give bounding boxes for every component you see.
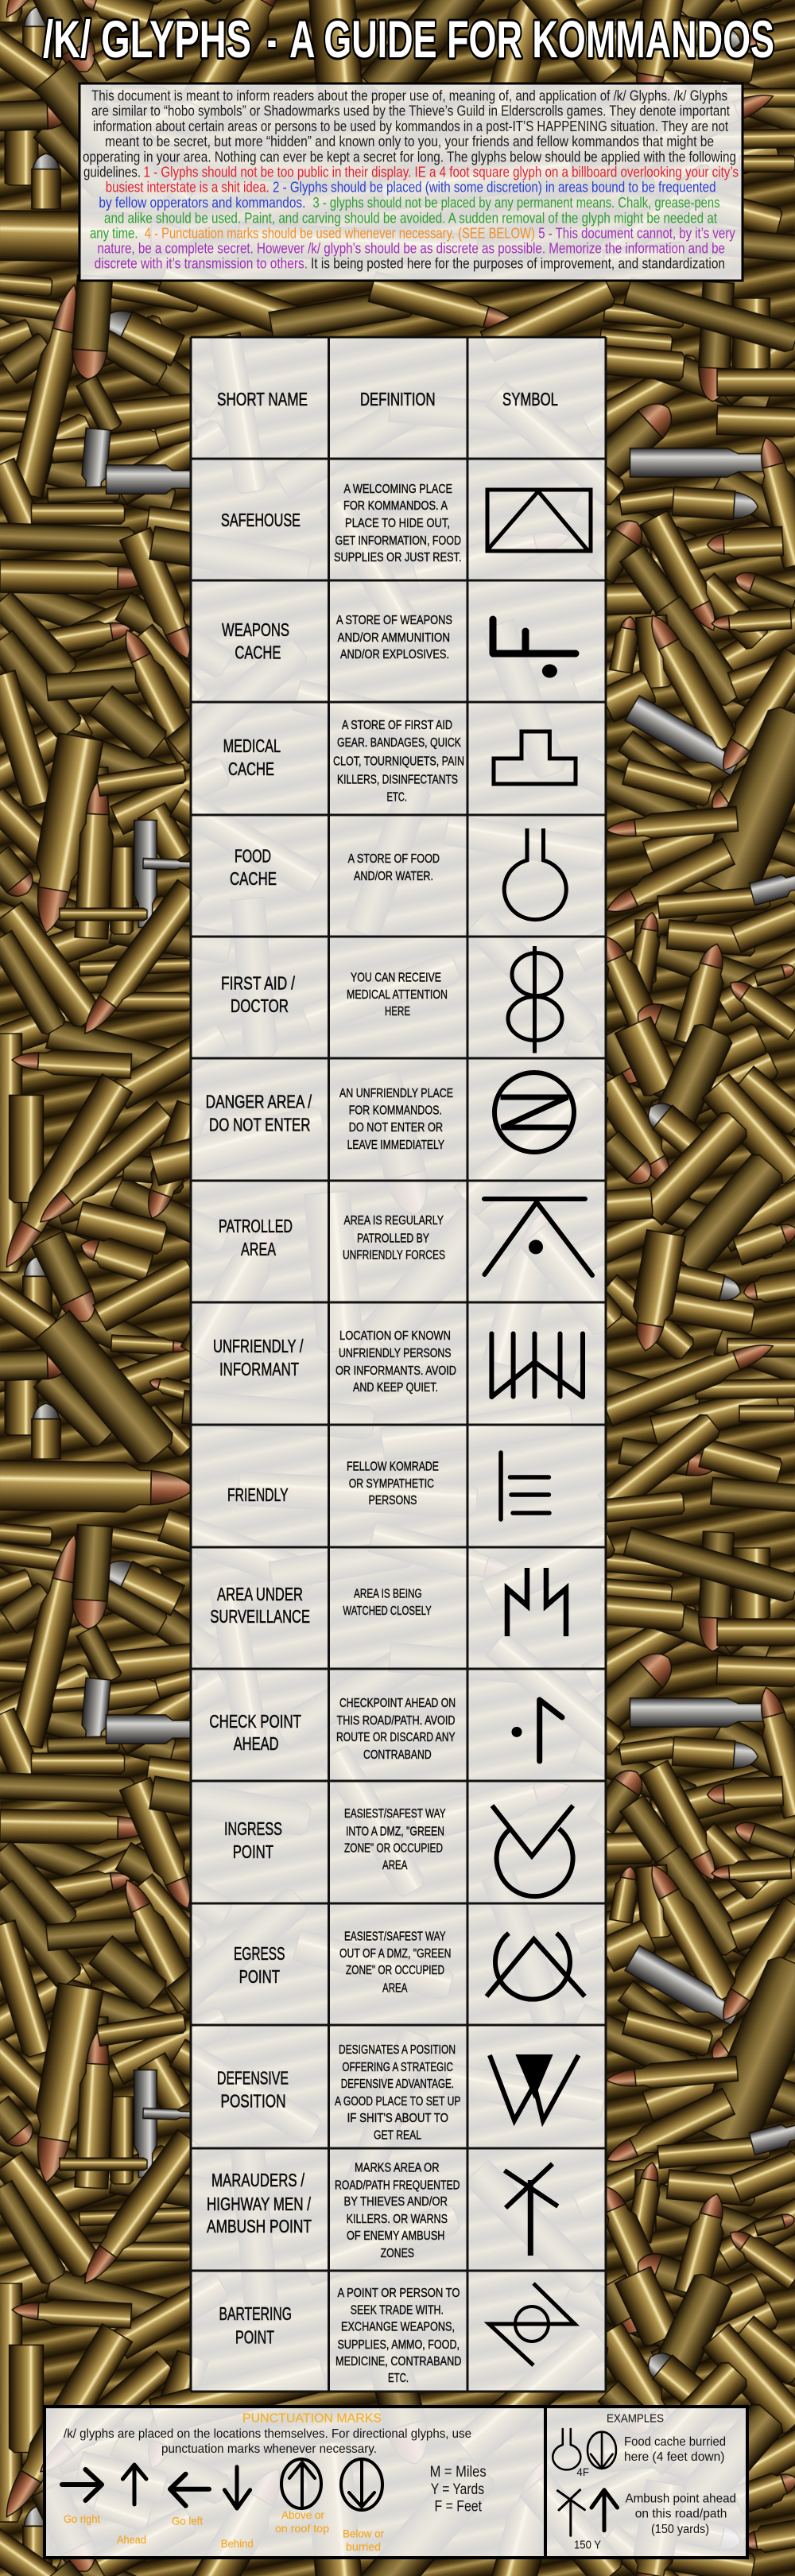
row: medical cache — [223, 719, 576, 805]
definition: bartering: SEEK TRADE WITH. — [351, 2304, 444, 2318]
definition: food cache: AND/OR WATER. — [354, 870, 433, 883]
definition: marauders: ROAD/PATH FREQUENTED — [335, 2178, 460, 2192]
definition: patrolled area — [343, 1214, 445, 1263]
definition: food cache — [348, 852, 440, 883]
definition: ingress: INTO A DMZ, "GREEN — [346, 1825, 444, 1839]
definition: danger area — [339, 1087, 453, 1152]
definition: bartering: SUPPLIES, AMMO, FOOD, — [337, 2338, 460, 2352]
table header row: SHORT NAME — [217, 389, 308, 409]
punctuation explanation text — [64, 2427, 471, 2456]
icon: weapons cache glyph — [493, 619, 576, 677]
definition: egress: AREA — [382, 1982, 408, 1996]
panel: introduction text: guidelines. — [83, 165, 141, 180]
definition: first aid: HERE — [385, 1005, 410, 1018]
example: ambush point ahead: on this road/path — [635, 2508, 727, 2521]
definition: weapons cache: AND/OR EXPLOSIVES. — [340, 648, 449, 661]
definition: check point: ROUTE OR DISCARD ANY — [336, 1731, 456, 1744]
definition: unfriendly: AND KEEP QUIET. — [353, 1381, 438, 1395]
panel: introduction text: 5 - This document cannot, by it’s very — [538, 225, 735, 241]
icon: danger area glyph — [494, 1073, 574, 1152]
row: medical cache: MEDICAL — [223, 735, 281, 756]
icon: arrow ahead — [122, 2465, 146, 2504]
panel: introduction text: meant to be secret, but more “hidden” and known only to you, your friends and fellow kommandos that might be — [105, 134, 714, 149]
table header row: SYMBOL — [502, 389, 558, 409]
definition: weapons cache — [336, 614, 452, 661]
arrow labels: Go right — [64, 2512, 100, 2525]
icon: circled arrow below — [341, 2459, 382, 2510]
panel: introduction text: It is being posted here for the purposes of improvement, and standardization — [311, 256, 725, 272]
arrow labels — [64, 2508, 384, 2553]
row: danger area — [206, 1073, 574, 1152]
definition: defensive: DEFENSIVE ADVANTAGE. — [341, 2077, 454, 2091]
icon: arrow go right — [62, 2469, 102, 2500]
definition: egress: ZONE" OR OCCUPIED — [346, 1964, 444, 1977]
row: unfriendly / informant — [213, 1329, 583, 1397]
definition: first aid — [347, 972, 448, 1018]
unit legend — [430, 2464, 487, 2516]
row: ingress point: POINT — [233, 1841, 273, 1862]
icon: ingress glyph — [492, 1806, 573, 1896]
row: bartering point: POINT — [235, 2326, 274, 2347]
row: food cache — [230, 828, 566, 920]
row: marauders: AMBUSH POINT — [207, 2216, 312, 2237]
panel: introduction text: busiest interstate is a shit idea. — [106, 180, 270, 196]
definition: first aid: MEDICAL ATTENTION — [347, 988, 448, 1002]
definition: check point: CHECKPOINT AHEAD ON — [339, 1697, 456, 1710]
definition: defensive: GET REAL — [374, 2129, 421, 2143]
row: patrolled area: AREA — [241, 1239, 276, 1259]
icon: marauders glyph — [505, 2164, 558, 2256]
punctuation explanation text: punctuation marks whenever necessary. — [161, 2442, 377, 2456]
row: weapons cache: WEAPONS — [222, 619, 289, 640]
icon: first aid glyph — [508, 946, 562, 1053]
definition: check point: CONTRABAND — [363, 1748, 432, 1762]
definition: ingress: EASIEST/SAFEST WAY — [344, 1807, 446, 1821]
example: food cache buried: 4F — [576, 2465, 589, 2478]
row: first aid / doctor: DOCTOR — [231, 995, 289, 1016]
definition: first aid: YOU CAN RECEIVE — [351, 972, 441, 985]
definition: defensive: DESIGNATES A POSITION — [339, 2043, 456, 2057]
row: ingress point — [224, 1806, 573, 1896]
definition: safehouse: SUPPLIES OR JUST REST. — [334, 551, 461, 564]
icon: arrow go left — [170, 2474, 209, 2506]
panel: punctuation marks and examples — [45, 2407, 747, 2558]
definition: marauders: MARKS AREA OR — [355, 2161, 440, 2175]
row: area under surveillance — [210, 1568, 566, 1636]
definition: bartering: ETC. — [388, 2372, 409, 2385]
panel: introduction text: by fellow opperators and kommandos. — [99, 195, 305, 211]
row: weapons cache: CACHE — [235, 642, 281, 663]
definition: check point: THIS ROAD/PATH. AVOID — [337, 1714, 455, 1728]
definition: bartering: EXCHANGE WEAPONS, — [341, 2320, 455, 2334]
heading: examples: EXAMPLES — [607, 2412, 664, 2426]
arrow labels: Behind — [221, 2537, 254, 2550]
row: friendly — [227, 1453, 549, 1519]
row: weapons cache — [222, 614, 576, 677]
definition: unfriendly: UNFRIENDLY PERSONS — [339, 1347, 452, 1360]
row: check point ahead — [209, 1697, 562, 1762]
row: egress point: EGRESS — [234, 1943, 285, 1964]
row: safehouse — [221, 483, 591, 564]
definition: medical cache — [333, 719, 464, 805]
definition: medical cache: CLOT, TOURNIQUETS, PAIN — [333, 755, 464, 768]
row: food cache: FOOD — [235, 846, 271, 867]
row: unfriendly / informant: INFORMANT — [219, 1359, 299, 1379]
icon: egress glyph — [487, 1934, 585, 2000]
row: marauders — [207, 2161, 558, 2260]
arrow labels: Ahead — [117, 2533, 146, 2546]
icon: medical cache glyph — [494, 731, 576, 784]
definition: surveillance: WATCHED CLOSELY — [343, 1604, 432, 1618]
definition: marauders: KILLERS. OR WARNS — [347, 2213, 448, 2226]
row: marauders: MARAUDERS / — [211, 2170, 304, 2190]
definition: danger area: AN UNFRIENDLY PLACE — [339, 1087, 453, 1100]
row: ingress point: INGRESS — [224, 1818, 282, 1839]
row: first aid / doctor — [221, 946, 562, 1053]
definition: marauders — [335, 2161, 460, 2260]
definition: friendly: FELLOW KOMRADE — [347, 1460, 439, 1474]
definition: ingress: ZONE" OR OCCUPIED — [344, 1842, 443, 1856]
panel: introduction text: 4 - Punctuation marks should be used whenever necessary. (SEE BELOW) — [145, 225, 535, 241]
definition: surveillance: AREA IS BEING — [354, 1588, 422, 1601]
definition: egress: OUT OF A DMZ, "GREEN — [339, 1947, 452, 1961]
icon: bartering glyph — [489, 2283, 575, 2365]
example: ambush point ahead — [557, 2490, 736, 2552]
definition: bartering: MEDICINE, CONTRABAND — [335, 2355, 461, 2368]
example: ambush point ahead: (150 yards) — [651, 2523, 709, 2536]
panel: introduction text: 3 - glyphs should not be placed by any permanent means. Chalk, grease-pens — [313, 195, 720, 211]
icon: food cache glyph — [504, 828, 566, 920]
row: defensive position: DEFENSIVE — [217, 2068, 289, 2089]
table header row: DEFINITION — [360, 389, 436, 409]
definition: food cache: A STORE OF FOOD — [348, 852, 440, 866]
example: ambush point ahead: 150 Y — [574, 2539, 601, 2552]
row: bartering point: BARTERING — [219, 2303, 292, 2324]
icon: arrow behind — [224, 2467, 250, 2508]
title: /K/ GLYPHS — [43, 10, 251, 68]
row: safehouse: SAFEHOUSE — [221, 510, 301, 530]
icon: safehouse glyph — [487, 490, 591, 551]
definition: ingress: AREA — [382, 1859, 408, 1872]
definition: defensive: IF SHIT'S ABOUT TO — [347, 2112, 448, 2125]
title: - — [267, 10, 277, 68]
row: medical cache: CACHE — [228, 758, 274, 779]
row: marauders: HIGHWAY MEN / — [207, 2194, 311, 2214]
definition: bartering: A POINT OR PERSON TO — [337, 2287, 460, 2300]
row: area under surveillance: AREA UNDER — [217, 1584, 303, 1604]
panel: introduction text: any time. — [90, 225, 138, 241]
arrow labels: Above or — [281, 2508, 324, 2521]
definition: bartering — [335, 2287, 461, 2385]
row: danger area: DO NOT ENTER — [209, 1115, 310, 1135]
icon: surveillance glyph — [507, 1568, 566, 1636]
definition: patrolled area: PATROLLED BY — [357, 1232, 429, 1245]
icon: defensive glyph — [490, 2054, 579, 2120]
definition: defensive — [335, 2043, 461, 2143]
row: patrolled area: PATROLLED — [219, 1216, 293, 1236]
definition: safehouse: PLACE TO HIDE OUT, — [345, 517, 450, 530]
definition: safehouse: FOR KOMMANDOS. A — [343, 499, 448, 513]
panel: glyph table — [191, 337, 606, 2392]
definition: unfriendly: OR INFORMANTS. AVOID — [335, 1364, 456, 1378]
row: egress point — [234, 1930, 585, 2000]
example: food cache buried — [553, 2429, 726, 2478]
definition: weapons cache: A STORE OF WEAPONS — [336, 614, 452, 627]
row: area under surveillance: SURVEILLANCE — [210, 1606, 310, 1627]
row: bartering point — [219, 2283, 575, 2385]
panel: introduction text: 2 - Glyphs should be placed (with some discretion) in areas bound to be frequented — [273, 180, 716, 196]
icon: food cache with down arrow — [553, 2429, 616, 2469]
definition: marauders: BY THIEVES AND/OR — [343, 2195, 448, 2209]
definition: egress: EASIEST/SAFEST WAY — [344, 1930, 446, 1943]
arrow labels: Below or — [343, 2528, 384, 2540]
punctuation explanation text: /k/ glyphs are placed on the locations themselves. For directional glyphs, use — [64, 2427, 471, 2441]
definition: check point — [336, 1697, 456, 1762]
table header row — [217, 389, 558, 409]
definition: weapons cache: AND/OR AMMUNITION — [337, 631, 450, 645]
row: first aid / doctor: FIRST AID / — [221, 973, 295, 994]
icon: patrolled area glyph — [484, 1199, 592, 1275]
definition: egress — [339, 1930, 452, 1996]
unit legend: M = Miles — [430, 2464, 487, 2481]
icon: ambush glyph with up arrow — [557, 2490, 617, 2535]
definition: safehouse — [334, 483, 461, 564]
definition: medical cache: A STORE OF FIRST AID — [342, 719, 452, 732]
definition: defensive: OFFERING A STRATEGIC — [342, 2061, 453, 2074]
definition: medical cache: ETC. — [386, 790, 407, 805]
definition: patrolled area: AREA IS REGULARLY — [343, 1214, 444, 1228]
table background and grid — [191, 337, 606, 2392]
row: unfriendly / informant: UNFRIENDLY / — [213, 1336, 304, 1356]
unit legend: Y = Yards — [431, 2481, 484, 2498]
definition: safehouse: GET INFORMATION, FOOD — [335, 534, 461, 548]
heading: punctuation marks: PUNCTUATION MARKS — [242, 2412, 382, 2426]
bottom panel background — [45, 2407, 747, 2558]
unit legend: F = Feet — [434, 2499, 483, 2516]
definition: friendly: PERSONS — [369, 1494, 417, 1507]
row: food cache: CACHE — [230, 868, 277, 889]
definition: marauders: ZONES — [381, 2247, 414, 2260]
row: danger area: DANGER AREA / — [206, 1092, 312, 1112]
definition: friendly: OR SYMPATHETIC — [349, 1477, 434, 1491]
definition: marauders: OF ENEMY AMBUSH — [347, 2229, 445, 2243]
row: check point ahead: AHEAD — [234, 1733, 278, 1754]
icon: check point glyph — [512, 1700, 562, 1761]
definition: danger area: LEAVE IMMEDIATELY — [347, 1139, 444, 1152]
example: food cache buried: Food cache burried — [624, 2435, 726, 2449]
definition: medical cache: KILLERS, DISINFECTANTS — [337, 773, 458, 787]
icon: circled arrow above — [281, 2459, 321, 2508]
icon: friendly glyph — [501, 1453, 549, 1519]
definition: unfriendly: LOCATION OF KNOWN — [339, 1329, 451, 1343]
definition: danger area: DO NOT ENTER OR — [349, 1121, 443, 1135]
definition: medical cache: GEAR. BANDAGES, QUICK — [337, 736, 461, 750]
icon: unfriendly glyph — [491, 1334, 583, 1397]
definition: ingress — [344, 1807, 446, 1872]
arrow labels: burried — [346, 2540, 381, 2553]
arrow labels: on roof top — [275, 2522, 329, 2535]
panel: introduction text: discrete with it’s transmission to others. — [95, 256, 308, 272]
definition: surveillance — [343, 1588, 432, 1618]
definition: defensive: A GOOD PLACE TO SET UP — [335, 2095, 461, 2109]
definition: danger area: FOR KOMMANDOS. — [349, 1104, 442, 1118]
row: check point ahead: CHECK POINT — [209, 1711, 301, 1732]
arrow labels: Go left — [172, 2515, 203, 2528]
definition: safehouse: A WELCOMING PLACE — [343, 483, 452, 496]
definition: patrolled area: UNFRIENDLY FORCES — [343, 1248, 445, 1263]
definition: unfriendly — [335, 1329, 456, 1395]
example: food cache buried: here (4 feet down) — [624, 2450, 725, 2464]
title — [43, 10, 774, 68]
row: defensive position — [217, 2043, 579, 2143]
row: defensive position: POSITION — [221, 2090, 286, 2111]
definition: friendly — [347, 1460, 439, 1507]
row: friendly: FRIENDLY — [227, 1484, 289, 1505]
example: ambush point ahead: Ambush point ahead — [625, 2493, 736, 2506]
row: egress point: POINT — [239, 1966, 280, 1987]
row: patrolled area — [219, 1199, 592, 1275]
panel: introduction text — [80, 83, 743, 281]
